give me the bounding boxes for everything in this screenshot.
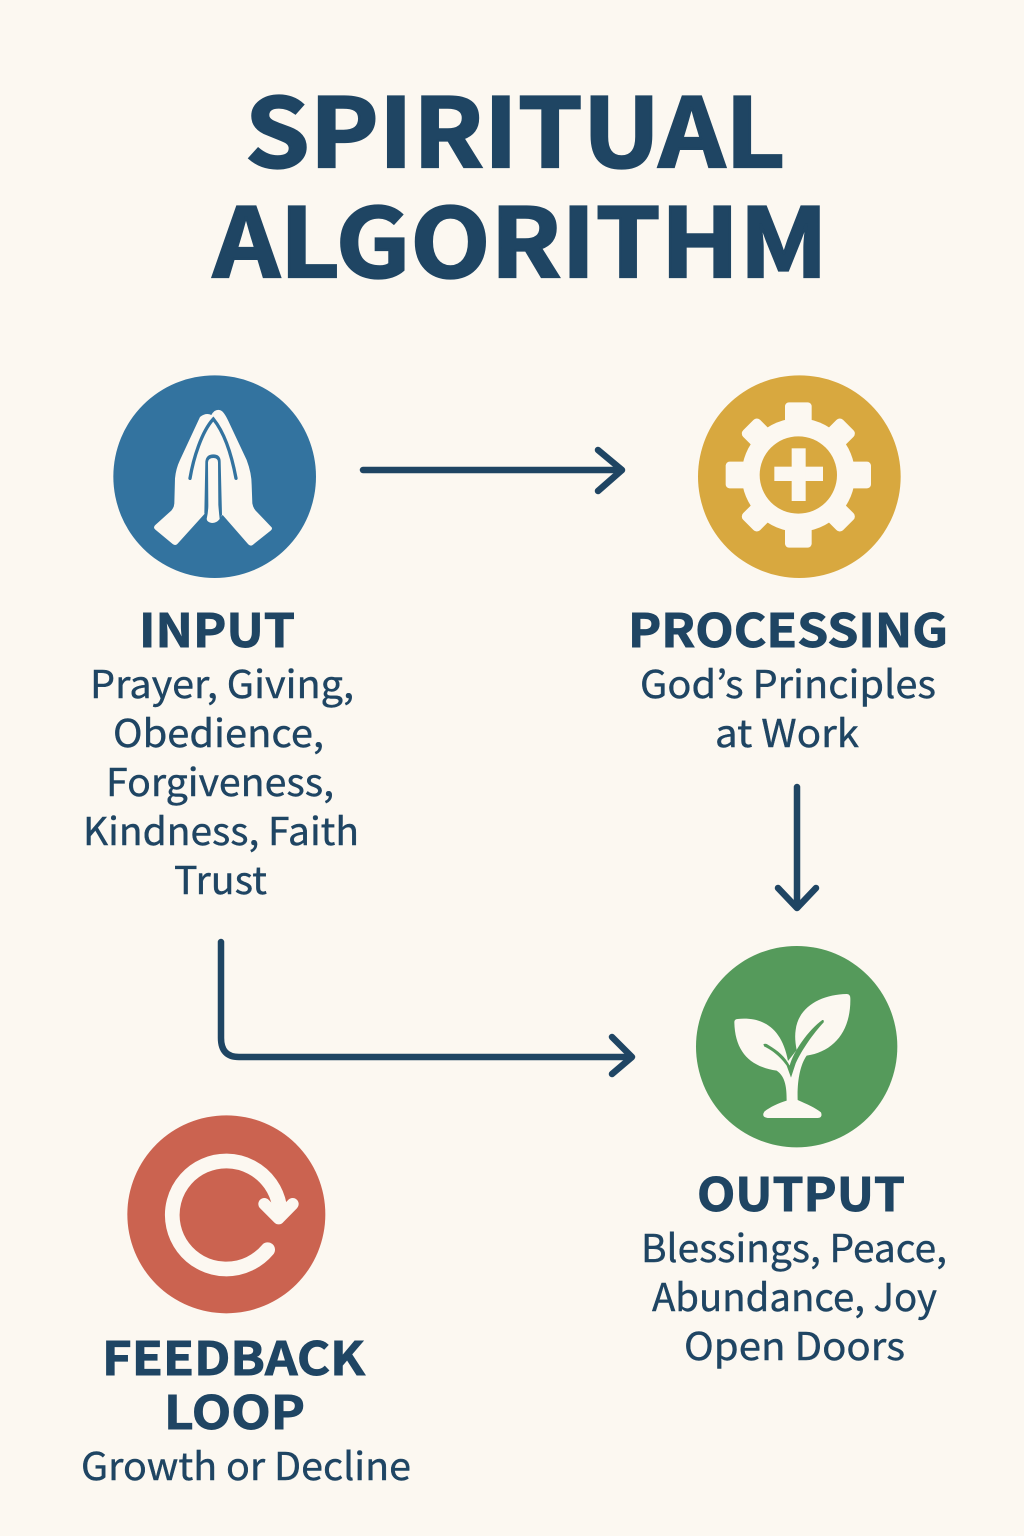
heading and text: feedback loop: FEEDBACK [102, 1323, 365, 1389]
heading and text: output: Blessings, Peace, [641, 1218, 947, 1273]
heading and text: output: Open Doors [684, 1316, 905, 1371]
heading and text: processing: PROCESSING [628, 595, 948, 661]
title: SPIRITUAL [245, 58, 785, 195]
heading and text: input: Prayer, Giving, [90, 654, 354, 709]
heading and text: feedback loop: Growth or Decline [81, 1436, 411, 1491]
arrow: input to processing [363, 450, 622, 491]
heading and text: processing: God’s Principles [640, 654, 936, 709]
heading and text: input: Kindness, Faith [83, 801, 359, 856]
icon: gear with plus [698, 375, 901, 578]
arrow: input to output [221, 942, 632, 1074]
heading and text: input: Obedience, [113, 703, 324, 758]
heading and text: feedback loop [81, 1323, 411, 1491]
heading and text: output: Abundance, Joy [652, 1267, 937, 1322]
heading and text: feedback loop: LOOP [164, 1377, 305, 1443]
heading and text: processing: at Work [715, 703, 859, 758]
icon: feedback loop [127, 1115, 325, 1313]
heading and text: input: Forgiveness, [106, 752, 334, 807]
title: ALGORITHM [212, 168, 828, 305]
heading and text: input: Trust [174, 850, 267, 905]
title [212, 58, 828, 305]
arrow: processing to output [778, 787, 816, 908]
heading and text: output [641, 1159, 947, 1371]
heading and text: input [83, 595, 359, 905]
heading and text: output: OUTPUT [697, 1159, 905, 1225]
icon: sprout [696, 946, 897, 1147]
icon: praying hands [113, 375, 316, 578]
heading and text: processing [628, 595, 948, 758]
heading and text: input: INPUT [139, 595, 295, 661]
